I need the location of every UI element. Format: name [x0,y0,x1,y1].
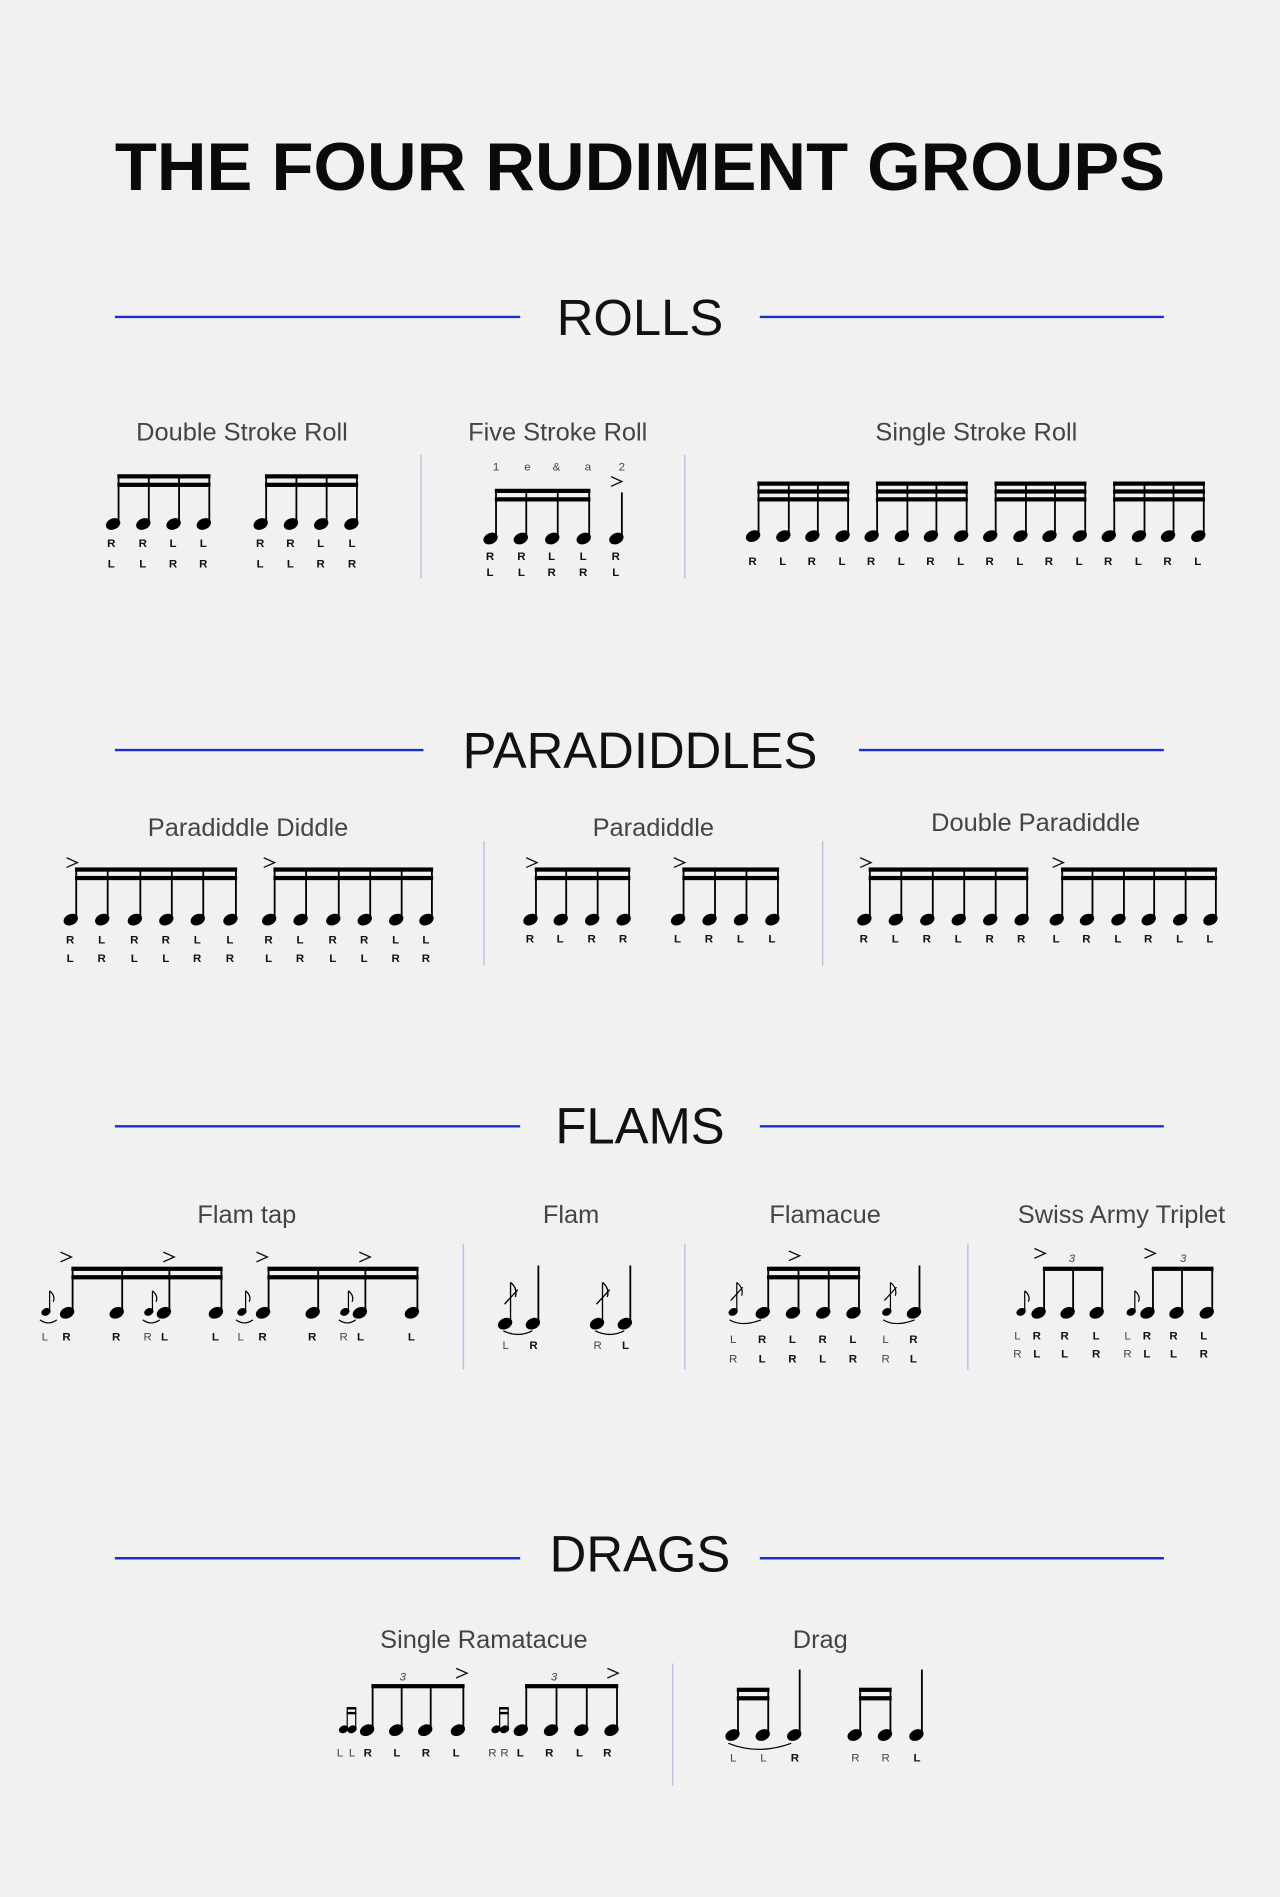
rudiment: five stroke roll: 2 [619,462,625,474]
rudiment: double stroke roll: R [256,538,265,550]
rudiment: double paradiddle [855,809,1219,945]
rudiment: single ramatacue: L [576,1748,583,1760]
rudiment: flam tap: R [258,1331,267,1343]
rudiment: five stroke roll: R [612,551,621,563]
rudiment: flamacue: L [819,1353,826,1365]
rudiment: flam: R [529,1340,538,1352]
rudiment: paradiddle diddle: R [162,935,171,947]
rudiment: single ramatacue: R [500,1748,509,1760]
rudiment: five stroke roll: 1 [493,462,499,474]
rudiment: paradiddle: L [674,933,681,945]
rudiment: flam tap: L [357,1331,364,1343]
rudiment: swiss army triplet: L [1093,1330,1100,1342]
rudiment: paradiddle diddle: R [130,935,139,947]
rudiment: paradiddle diddle: L [392,935,399,947]
rudiment: paradiddle diddle: Paradiddle Diddle [148,814,348,842]
rudiment: double paradiddle: R [860,933,869,945]
rudiment: paradiddle diddle: R [264,935,273,947]
rudiment: flam: L [503,1340,509,1352]
rudiment: five stroke roll: L [486,567,493,579]
rudiment: single ramatacue: Single Ramatacue [380,1626,588,1654]
rudiment: five stroke roll: R [517,551,526,563]
rudiment: single stroke roll: Single Stroke Roll [875,418,1077,446]
rudiment: five stroke roll: R [486,551,495,563]
rudiment: double stroke roll: R [348,558,357,570]
rudiment: paradiddle diddle [62,814,436,965]
rudiment: five stroke roll: Five Stroke Roll [468,418,647,446]
rudiment: double stroke roll: L [170,538,177,550]
rudiment: swiss army triplet: L [1061,1348,1068,1360]
rudiment: double stroke roll: R [316,558,325,570]
rudiment: single stroke roll: L [1194,556,1201,568]
rudiment: single stroke roll: L [1076,556,1083,568]
rudiment: double stroke roll: L [139,558,146,570]
rudiment: flam tap: L [42,1331,48,1343]
rudiment: double stroke roll [104,418,361,570]
rudiment: double paradiddle: L [1114,933,1121,945]
rudiment: double paradiddle: R [1082,933,1091,945]
rudiment: swiss army triplet: R [1013,1348,1022,1360]
rudiment: flam tap: R [308,1331,317,1343]
rudiment: double paradiddle: L [955,933,962,945]
rudiment: single stroke roll: L [1135,556,1142,568]
rudiment: double stroke roll: R [169,558,178,570]
heading: rolls: ROLLS [557,289,723,346]
rudiment: swiss army triplet: R [1169,1330,1178,1342]
rudiment: paradiddle diddle: R [97,953,106,965]
rudiment: paradiddle diddle: L [361,953,368,965]
rudiment: flamacue: L [882,1334,889,1346]
rudiment: swiss army triplet: Swiss Army Triplet [1018,1201,1225,1229]
rudiment: single ramatacue: L [349,1748,355,1760]
rudiment: double paradiddle: L [892,933,899,945]
rudiment: flamacue: L [849,1334,856,1346]
rudiment: paradiddle: L [737,933,744,945]
rudiment: paradiddle diddle: L [67,953,74,965]
rudiment: single ramatacue [337,1626,621,1760]
rudiment: drag [723,1626,926,1764]
rudiment: single ramatacue: L [393,1748,400,1760]
rudiment: paradiddle: L [557,933,564,945]
rudiment: five stroke roll: R [579,567,588,579]
rudiment: single ramatacue: R [603,1748,612,1760]
rudiment: drag: L [760,1752,767,1764]
rudiment: swiss army triplet: 3 [1069,1253,1076,1265]
rudiment: single stroke roll: L [898,556,905,568]
rudiment: double paradiddle: L [1176,933,1183,945]
rudiment: paradiddle: R [587,933,596,945]
rudiment: drag: R [791,1752,800,1764]
title: THE FOUR RUDIMENT GROUPS [115,130,1165,205]
rudiment: single ramatacue: 3 [551,1671,558,1683]
rudiment: single ramatacue: R [364,1748,373,1760]
rudiment: single stroke roll: R [1163,556,1172,568]
rudiment: flamacue: R [788,1353,797,1365]
rudiment: single stroke roll: R [1045,556,1054,568]
rudiment: paradiddle diddle: R [226,953,235,965]
rudiment: five stroke roll: a [585,462,592,474]
rudiment: five stroke roll: e [524,462,531,474]
rudiment: double paradiddle: R [923,933,932,945]
rudiment: flam tap: R [62,1331,71,1343]
heading: paradiddles: PARADIDDLES [463,722,817,779]
rudiment: single stroke roll [744,418,1207,568]
rudiment: single stroke roll: L [957,556,964,568]
rudiment: paradiddle diddle: L [98,935,105,947]
rudiment: single stroke roll: R [985,556,994,568]
rudiment: five stroke roll [468,418,647,579]
rudiment: flamacue: R [849,1353,858,1365]
rudiment: flam tap: L [238,1331,244,1343]
rudiment: swiss army triplet: L [1200,1330,1207,1342]
rudiment: flam tap: R [143,1331,152,1343]
rudiment: swiss army triplet: L [1170,1348,1177,1360]
rudiment: flamacue [727,1201,923,1365]
rudiment: double stroke roll: L [257,558,264,570]
rudiment: flam tap [40,1201,421,1343]
rudiment: paradiddle diddle: R [391,953,400,965]
rudiment: single stroke roll: R [1104,556,1113,568]
rudiment: paradiddle: Paradiddle [593,814,714,842]
rudiment: single ramatacue: L [337,1748,343,1760]
rudiment: single stroke roll: R [808,556,817,568]
rudiment: paradiddle diddle: L [329,953,336,965]
rudiment: five stroke roll: L [580,551,587,563]
rudiment: double stroke roll: L [349,538,356,550]
rudiment: paradiddle diddle: R [329,935,338,947]
rudiment: double paradiddle: R [1017,933,1026,945]
rudiment: double paradiddle: R [985,933,994,945]
rudiment: paradiddle diddle: L [265,953,272,965]
rudiment: paradiddle: R [526,933,535,945]
rudiment: flam tap: Flam tap [197,1201,296,1229]
rudiment: single stroke roll: L [839,556,846,568]
rudiment: paradiddle diddle: L [422,935,429,947]
rudiment: drag: R [881,1752,890,1764]
rudiment: double stroke roll: R [199,558,208,570]
rudiment: double stroke roll: L [108,558,115,570]
rudiment: swiss army triplet: L [1124,1330,1131,1342]
rudiment: swiss army triplet: R [1200,1348,1209,1360]
heading: flams: FLAMS [555,1097,725,1154]
rudiment: paradiddle diddle: R [360,935,369,947]
rudiment: five stroke roll: R [548,567,557,579]
rudiment: single ramatacue: R [488,1748,497,1760]
rudiment: flam tap: R [112,1331,121,1343]
rudiment: paradiddle: R [619,933,628,945]
rudiment: flam tap: L [161,1331,168,1343]
rudiment: swiss army triplet: L [1033,1348,1040,1360]
rudiment: five stroke roll: L [518,567,525,579]
rudiment: flamacue: Flamacue [769,1201,881,1229]
rudiment: double paradiddle: L [1053,933,1060,945]
rudiment: paradiddle: L [768,933,775,945]
rudiment: double paradiddle: L [1206,933,1213,945]
rudiment: flamacue: R [819,1334,828,1346]
rudiment: flamacue: L [759,1353,766,1365]
rudiment: flamacue: L [789,1334,796,1346]
rudiment: swiss army triplet: L [1014,1330,1021,1342]
rudiment: paradiddle diddle: L [226,935,233,947]
rudiment: flamacue: R [881,1353,890,1365]
rudiment: paradiddle diddle: L [194,935,201,947]
rudiment: single stroke roll: R [926,556,935,568]
rudiment: swiss army triplet [1013,1201,1225,1360]
rudiment: single ramatacue: R [422,1748,431,1760]
rudiment: single ramatacue: 3 [400,1671,407,1683]
rudiment: paradiddle diddle: R [66,935,75,947]
rudiment: double stroke roll: R [107,538,116,550]
rudiment: double stroke roll: L [287,558,294,570]
rudiment: flam: L [622,1340,629,1352]
rudiment: paradiddle: R [705,933,714,945]
rudiment: double stroke roll: Double Stroke Roll [136,418,348,446]
rudiment: paradiddle diddle: L [297,935,304,947]
rudiment: swiss army triplet: 3 [1180,1253,1187,1265]
heading: drags: DRAGS [550,1526,730,1583]
rudiment: single ramatacue: L [453,1748,460,1760]
rudiment: paradiddle diddle: R [422,953,431,965]
rudiment: swiss army triplet: R [1123,1348,1132,1360]
rudiment: flam tap: L [408,1331,415,1343]
rudiment: double paradiddle: Double Paradiddle [931,809,1140,837]
rudiment: swiss army triplet: L [1143,1348,1150,1360]
rudiment: flamacue: L [730,1334,736,1346]
rudiment: drag: L [730,1752,736,1764]
rudiment: swiss army triplet: R [1060,1330,1069,1342]
rudiment: flam: Flam [543,1201,599,1229]
rudiment: swiss army triplet: R [1143,1330,1152,1342]
rudiment: paradiddle diddle: L [162,953,169,965]
rudiment: flam: R [594,1340,602,1352]
rudiment: flam [496,1201,634,1352]
rudiment: swiss army triplet: R [1092,1348,1101,1360]
rudiment: flam tap: R [339,1331,348,1343]
rudiment: flamacue: R [729,1353,737,1365]
rudiment: paradiddle diddle: L [131,953,138,965]
rudiment: double paradiddle: R [1144,933,1153,945]
rudiment: single stroke roll: L [779,556,786,568]
rudiment: flamacue: L [910,1353,917,1365]
rudiment: drag: R [851,1752,859,1764]
rudiment: flamacue: R [909,1334,918,1346]
rudiment: single stroke roll: R [748,556,757,568]
rudiment: five stroke roll: L [548,551,555,563]
rudiment: flamacue: R [758,1334,767,1346]
rudiment: flam tap: L [212,1331,219,1343]
rudiment: single stroke roll: R [867,556,876,568]
rudiment: five stroke roll: & [553,462,561,474]
rudiment: five stroke roll: L [612,567,619,579]
rudiment: double stroke roll: L [317,538,324,550]
rudiment: single stroke roll: L [1016,556,1023,568]
rudiment: swiss army triplet: R [1033,1330,1042,1342]
rudiment: single ramatacue: L [517,1748,524,1760]
rudiment: double stroke roll: R [139,538,148,550]
rudiment: drag: L [914,1752,921,1764]
rudiment: drag: Drag [793,1626,848,1654]
rudiment: paradiddle diddle: R [193,953,202,965]
rudiment: single ramatacue: R [545,1748,554,1760]
rudiment: double stroke roll: L [200,538,207,550]
rudiment: double stroke roll: R [286,538,295,550]
rudiment: paradiddle diddle: R [296,953,305,965]
rudiment: paradiddle [521,814,782,945]
